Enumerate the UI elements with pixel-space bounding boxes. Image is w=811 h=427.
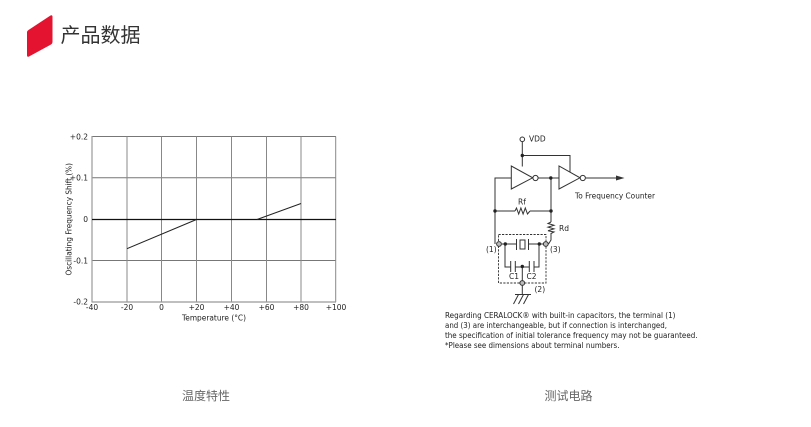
inverter 1 output bubble — [533, 175, 538, 181]
circuit labels: (1) — [486, 245, 497, 254]
y axis tick labels: -0.2 — [73, 298, 88, 306]
junction dots — [493, 154, 553, 268]
data line: high temperature segment — [257, 204, 301, 220]
crystal resonator — [516, 239, 528, 250]
circuit diagram: test circuit — [486, 134, 656, 304]
ground symbol — [514, 294, 531, 304]
x axis tick labels: +80 — [293, 303, 309, 312]
title: 产品数据 — [60, 24, 140, 47]
circuit labels: (3) — [550, 245, 561, 254]
resonator package outline — [498, 234, 546, 283]
capacitors C1 and C2 — [511, 261, 534, 272]
note text about terminals: the specification of initial tolerance frequency may not be guaranteed. — [445, 331, 698, 340]
circuit labels: Rf — [518, 198, 526, 206]
y axis tick labels: 0 — [83, 215, 88, 224]
data line: low temperature segment — [127, 220, 196, 249]
VDD terminal — [520, 137, 525, 142]
y axis tick labels: +0.1 — [70, 174, 88, 182]
circuit labels: To Frequency Counter — [574, 192, 656, 200]
y axis tick labels: -0.1 — [73, 256, 88, 266]
y axis tick labels — [70, 132, 88, 306]
note text about terminals: *Please see dimensions about terminal numbers. — [445, 341, 620, 350]
terminals 1, 2, 3 — [497, 242, 548, 285]
caption: temperature characteristics: 温度特性 — [182, 388, 230, 403]
output arrow — [616, 176, 624, 180]
inverter 2 output bubble — [580, 175, 585, 181]
x axis tick labels: -20 — [121, 303, 133, 312]
inverter 2 — [559, 166, 580, 189]
circuit labels: C2 — [526, 272, 537, 281]
note text about terminals — [445, 311, 698, 350]
x axis tick labels: +20 — [189, 303, 205, 312]
icon: red logo parallelogram — [27, 15, 52, 57]
resistor Rf — [515, 208, 530, 214]
y axis title: Oscillating Frequency Shift (%) — [64, 163, 74, 276]
circuit wiring — [495, 142, 618, 294]
circuit labels: VDD — [529, 134, 546, 144]
x axis tick labels: -40 — [86, 303, 98, 312]
circuit labels: Rd — [559, 224, 569, 233]
x axis tick labels: +100 — [326, 303, 347, 312]
x axis tick labels — [86, 303, 347, 312]
note text about terminals: and (3) are interchangeable, but if connection is interchanged, — [445, 321, 667, 330]
circuit labels: C1 — [509, 272, 519, 281]
inverter 1 — [511, 166, 533, 189]
x axis tick labels: +40 — [224, 303, 240, 312]
zero line — [92, 218, 336, 220]
x axis title: Temperature (°C) — [181, 314, 246, 322]
note text about terminals: Regarding CERALOCK® with built-in capacitors, the terminal (1) — [445, 311, 676, 320]
caption: test circuit: 测试电路 — [544, 388, 593, 403]
y axis tick labels: +0.2 — [70, 132, 88, 142]
resistor Rd — [548, 222, 554, 234]
circuit labels: (2) — [534, 285, 545, 294]
chart grid — [92, 136, 336, 302]
line chart: temperature characteristics — [64, 132, 347, 322]
x axis tick labels: 0 — [159, 303, 164, 312]
x axis tick labels: +60 — [259, 303, 275, 312]
circuit labels — [486, 134, 656, 294]
